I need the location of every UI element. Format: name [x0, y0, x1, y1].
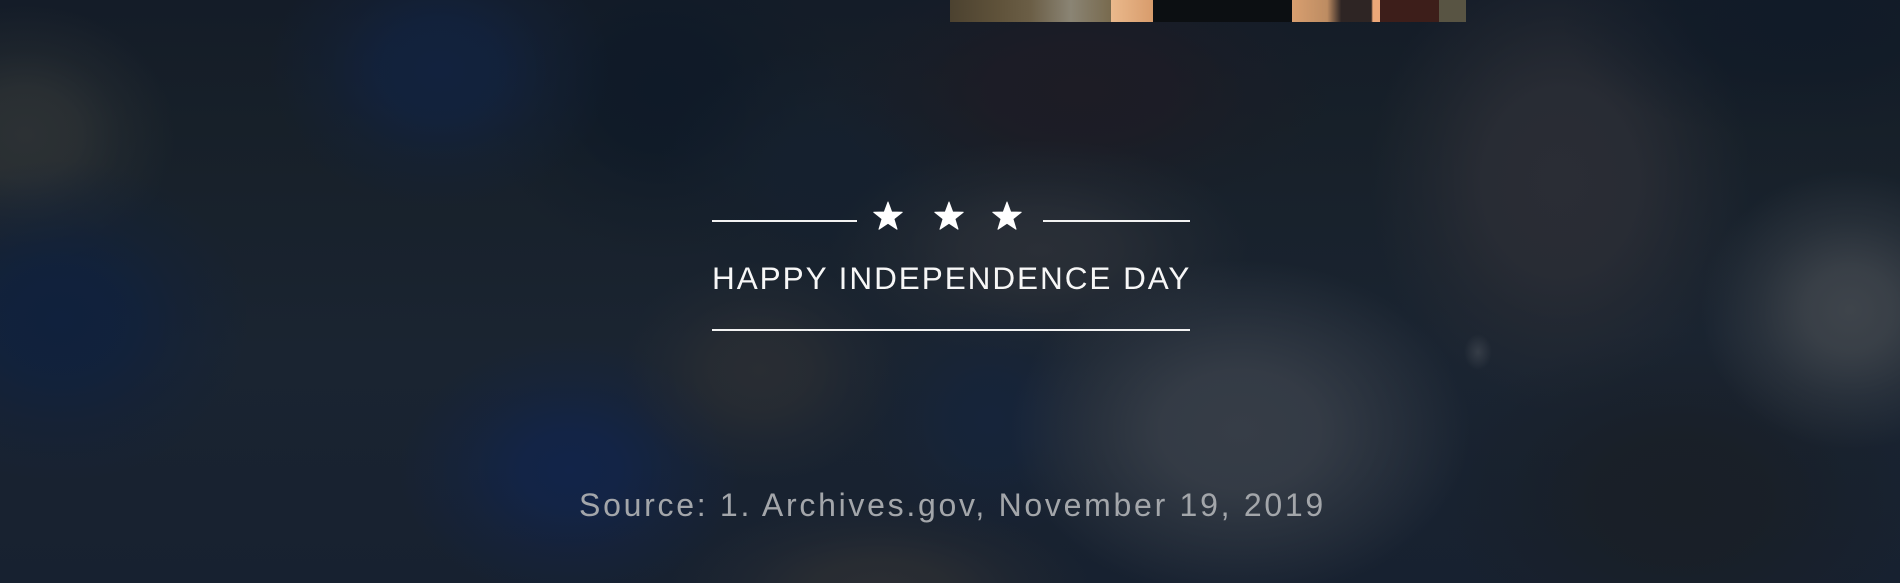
photo: brown area [950, 0, 1111, 22]
photo: shirt skin [1292, 0, 1380, 22]
left rule [712, 220, 857, 222]
heading: HAPPY INDEPENDENCE DAY [712, 260, 1191, 296]
photo strip at top [950, 0, 1466, 22]
right rule [1043, 220, 1190, 222]
source: Source: 1. Archives.gov, November 19, 2019 [579, 487, 1326, 523]
photo: dark red [1380, 0, 1439, 22]
photo: arm [1111, 0, 1153, 22]
ornament: lines and stars [712, 202, 1190, 230]
photo: olive [1439, 0, 1466, 22]
bottom rule [712, 329, 1190, 331]
stars [873, 202, 1022, 230]
